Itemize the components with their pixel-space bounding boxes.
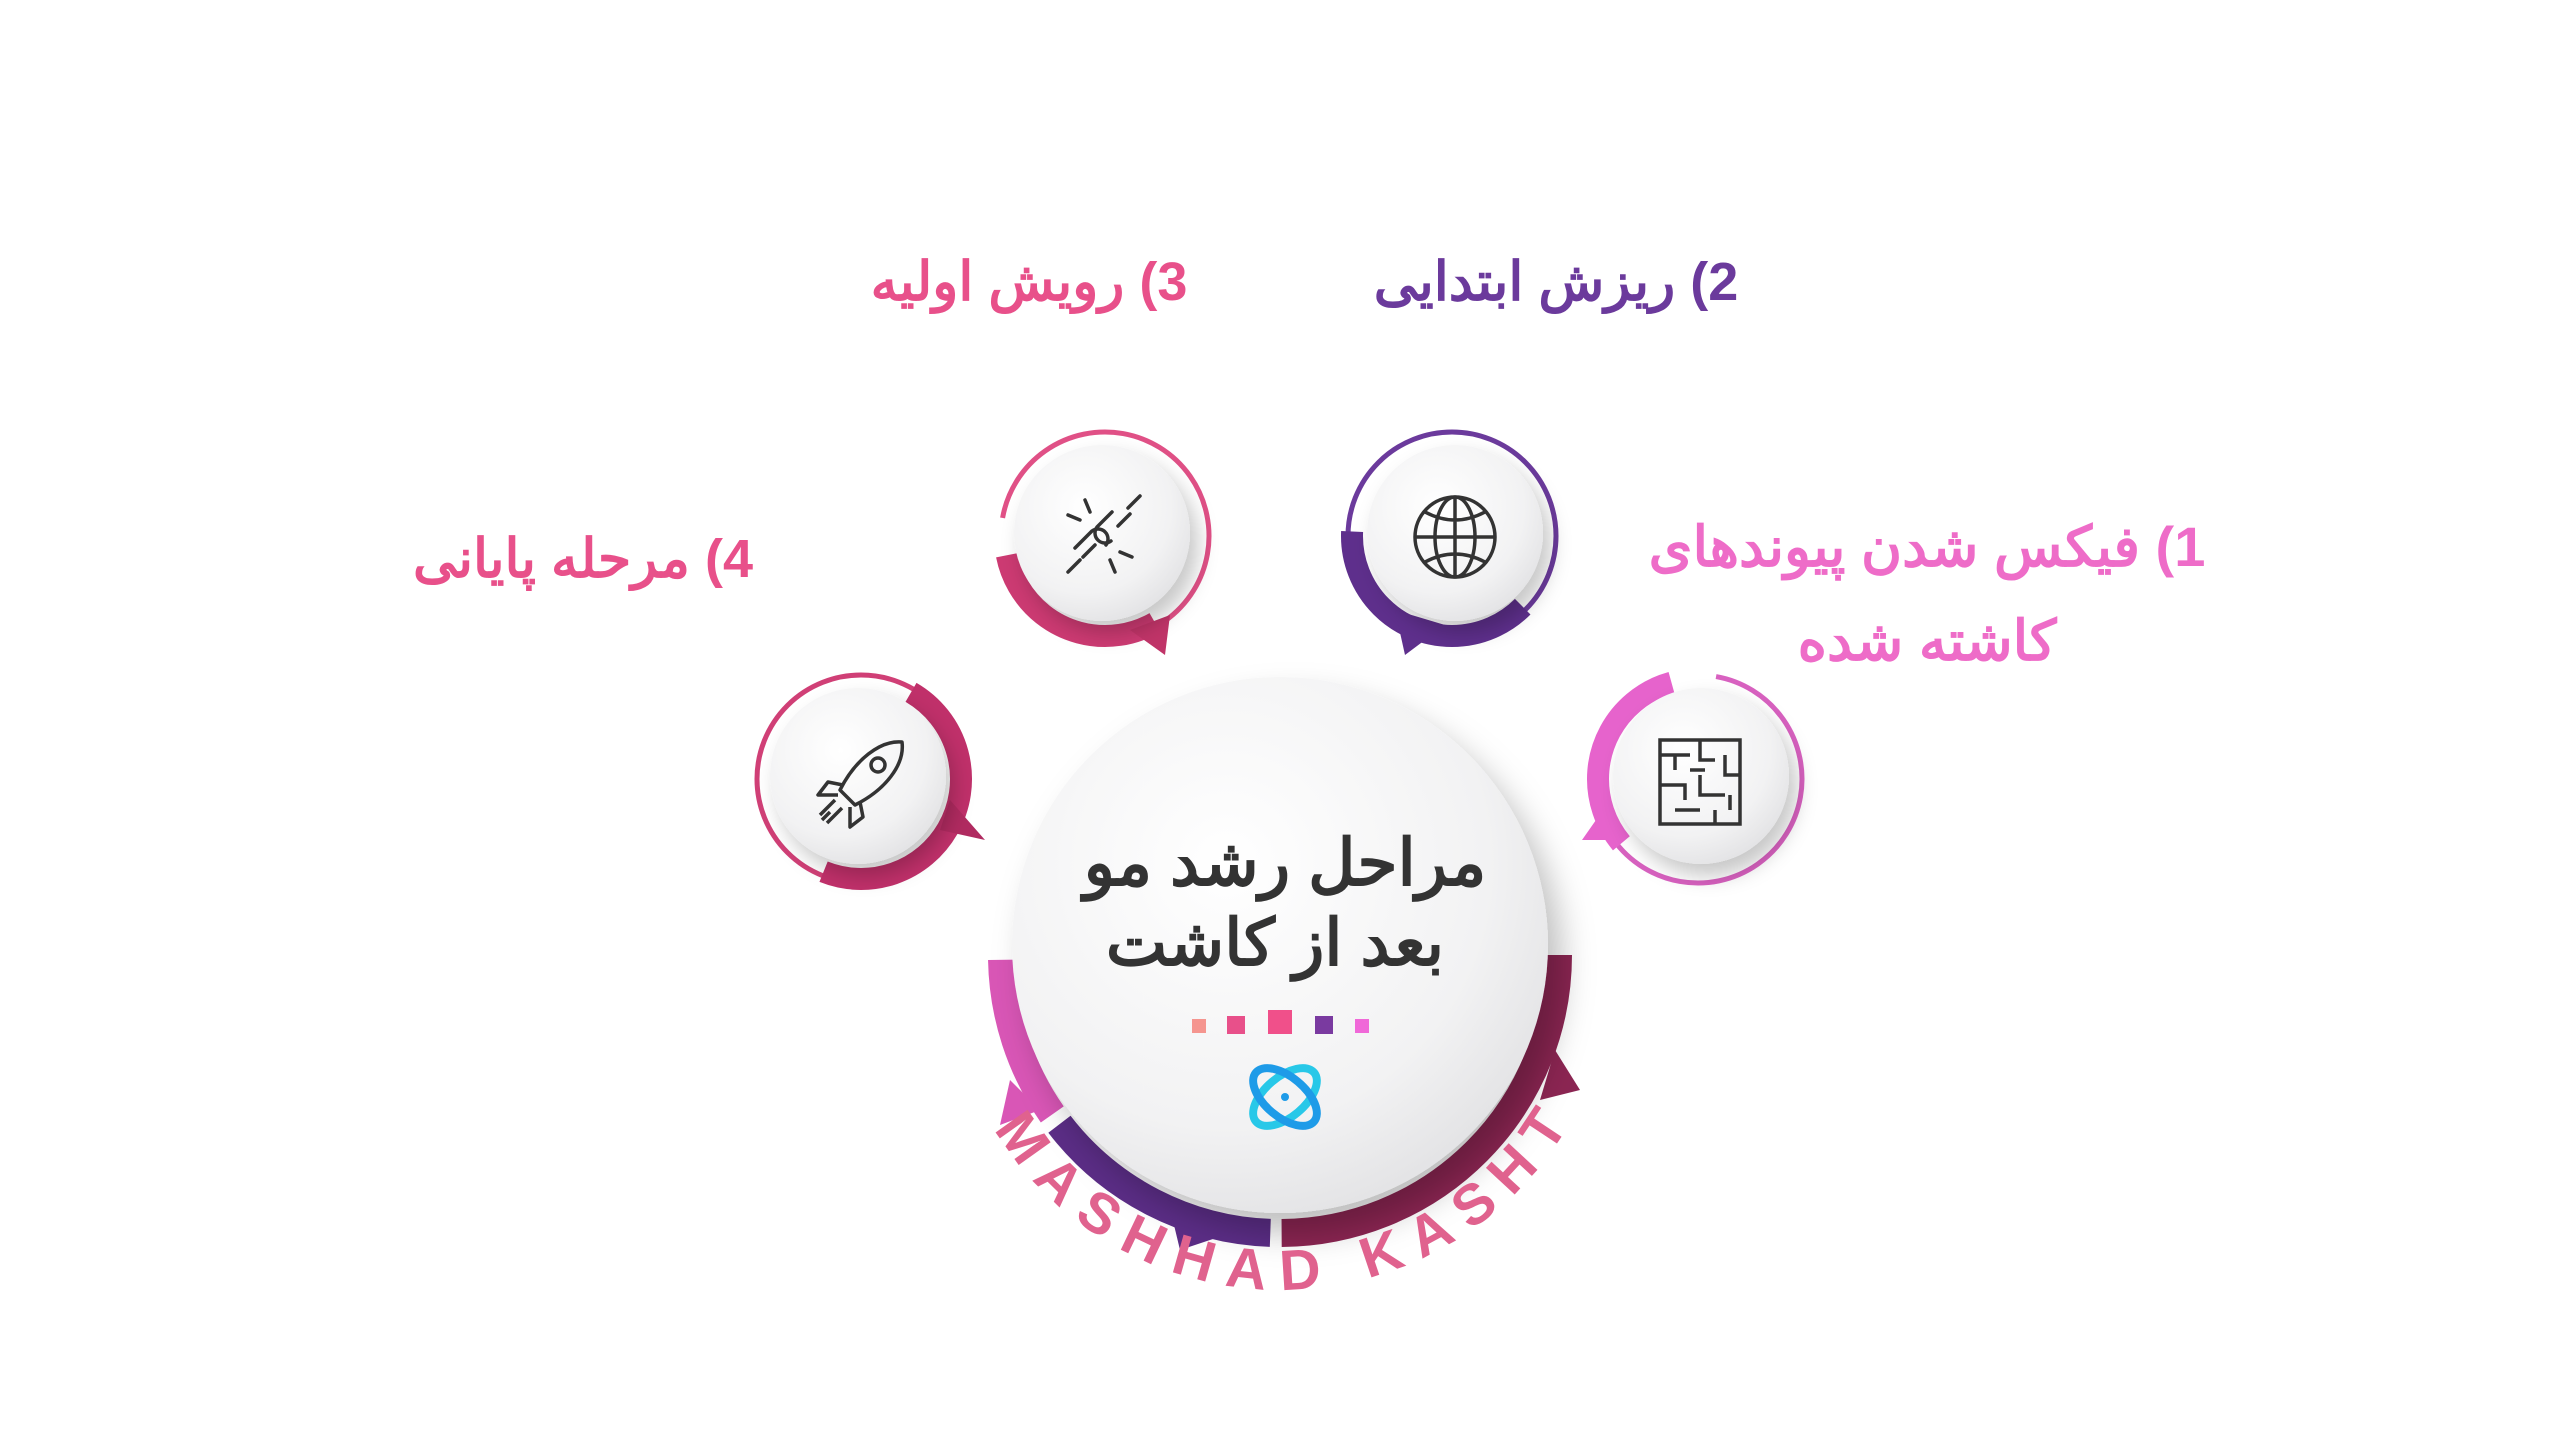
heading: step 1 [1649,515,2205,672]
icon: logo [1243,1057,1327,1137]
center circle [1012,677,1548,1213]
brand arc text: MASHHAD KASHT [996,1104,1562,1290]
icon: globe [1415,497,1495,577]
heading: step 3: 3) رویش اولیه [871,252,1187,315]
node: rocket (step 4) [724,642,998,916]
center title: بعد از کاشت [1106,906,1444,982]
heading: step 4: 4) مرحله پایانی [413,529,753,592]
center title [1080,826,1486,982]
icon: broken chain [1068,496,1140,572]
icon: rocket [818,742,902,827]
node: globe (step 2) [1311,395,1593,677]
node: maze (step 1) [1557,638,1839,920]
node: chain (step 3) [968,399,1242,673]
color squares [1192,1010,1369,1034]
icon: maze [1660,740,1740,824]
heading: step 1: کاشته شده [1798,609,2058,672]
center ring [893,568,1667,1342]
heading: step 2: 2) ریزش ابتدایی [1374,252,1738,315]
center title: مراحل رشد مو [1080,826,1486,902]
heading: step 1: 1) فیکس شدن پیوندهای [1649,515,2205,581]
